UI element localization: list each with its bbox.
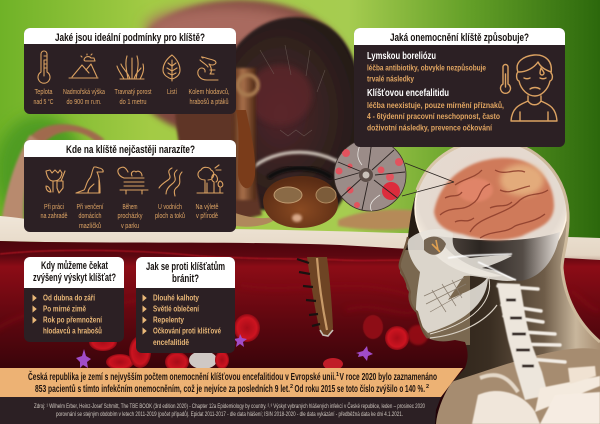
- icon: leaf: [163, 55, 180, 81]
- human head x-ray: [400, 130, 600, 424]
- heading: when to expect ticks: [24, 257, 124, 288]
- panel: where you meet ticks: Kde na klíště nejčastěji narazíte?: [66, 144, 195, 156]
- callout: statistics strip: 853 pacientů s tímto infekčním onemocněním, což je nejvíce za posledních 9 let.: [35, 383, 290, 395]
- text: tick-borne encephalitis: léčba neexistuje, pouze mírnění příznaků,: [367, 100, 504, 110]
- list: protection measures: Repelenty: [153, 314, 184, 324]
- list: months and conditions: [33, 292, 102, 336]
- purple platelets: [76, 334, 373, 368]
- text: tick-borne encephalitis: [367, 88, 504, 132]
- icon captions: Listí: [167, 89, 177, 96]
- text: Lyme borreliosis: trvalé následky: [367, 74, 414, 84]
- text: tick-borne encephalitis: doživotní následky, prevence očkování: [367, 124, 493, 132]
- text: tick-borne encephalitis: 4 - 6týdenní pracovní neschopnost, často: [367, 112, 500, 121]
- icon: thermometer: [38, 51, 50, 83]
- panel: diseases: Jaká onemocnění klíště způsobuje?: [390, 32, 529, 44]
- icon captions: [34, 88, 230, 106]
- panel: how to protect: bránit?: [172, 273, 199, 285]
- brain: [434, 158, 554, 240]
- icon captions: procházky: [118, 213, 143, 220]
- callout: statistics strip: 1: [336, 372, 339, 378]
- text: sources strip: porovnání se stejným obdobím v letech 2011-2019 (počet případů). Epidat 2011-2017 - dle data hlášení; ISIN 2018-2020 - dle data vykázání - předběžná data ke dni 4.1.2021.: [56, 411, 403, 418]
- panel: when to expect ticks: Kdy můžeme čekat: [41, 260, 108, 272]
- icon captions: ploch a toků: [155, 212, 185, 220]
- icon captions: domácích: [78, 213, 102, 220]
- skull face bones: [408, 229, 516, 333]
- panel: ideal conditions: Jaké jsou ideální podmínky pro klíště?: [55, 32, 205, 44]
- panel: where you meet ticks: [24, 140, 236, 232]
- text: tick-borne encephalitis: Klíšťovou encefalitidu: [367, 88, 449, 99]
- panel: how to protect: [136, 257, 235, 353]
- list: months and conditions: Po mírné zimě: [43, 304, 86, 314]
- icon captions: do 900 m n.m.: [66, 99, 102, 106]
- icon: mountains and sun: [69, 54, 98, 78]
- tick hypostome in skin: [297, 257, 333, 336]
- panel: diseases: [354, 28, 565, 147]
- heading: where you meet ticks: [24, 140, 236, 157]
- vertebrae spine: [472, 283, 600, 424]
- blood vessel background: [0, 241, 600, 424]
- callout: statistics strip: 2: [290, 384, 293, 390]
- icon captions: nad 5 °C: [34, 98, 54, 106]
- icon: trees: [197, 165, 223, 193]
- icon captions: hrabošů a ptáků: [190, 98, 229, 106]
- callout: statistics strip: Česká republika je zemí s nejvyšším počtem onemocnění klíšťovou encefalitidou v Evropské unii.: [28, 370, 336, 383]
- text: Lyme borreliosis: [367, 51, 486, 84]
- tick legs: [232, 68, 256, 200]
- heading: ideal conditions: [24, 28, 236, 44]
- list: protection measures: Světlé oblečení: [153, 304, 199, 314]
- icon captions: Na výletě: [196, 204, 219, 211]
- text: Lyme borreliosis: Lymskou boreliózu: [367, 51, 436, 62]
- list: months and conditions: Od dubna do září: [43, 292, 95, 302]
- text: sources strip: Zdroj: ¹ Wilhelm Erber, Heinz-Josef Schmitt, The TBE BOOK (3rd edition 2020) - Chapter 12a Epidemiology by country. ²˒³ Výskyt vybraných hlášených infekcí v České republice, leden – prosinec 2020: [34, 403, 425, 410]
- tick mouth capitulum: [263, 176, 338, 228]
- human skin layer: [0, 216, 600, 262]
- heading: diseases: [354, 28, 565, 45]
- heading: how to protect: [136, 257, 235, 288]
- icon: squirrel: [198, 57, 218, 80]
- icon captions: [40, 204, 219, 230]
- panel: when to expect ticks: zvýšený výskyt klíšťat?: [33, 272, 116, 284]
- callout: statistics strip: Od roku 2015 se toto číslo zvýšilo o 140 %.: [294, 383, 425, 395]
- skull cranium: [415, 140, 567, 276]
- icon captions: do 1 metru: [120, 99, 147, 106]
- icon captions: Při práci: [44, 204, 64, 211]
- text: Lyme borreliosis: léčba antibiotiky, obvykle nezpůsobuje: [367, 62, 486, 72]
- list: protection measures: [143, 292, 221, 347]
- list: protection measures: Očkování proti klíšťové: [153, 326, 221, 336]
- tick body with legs: [0, 0, 430, 232]
- icon captions: Nadmořská výška: [63, 89, 105, 96]
- icon: river: [159, 168, 182, 196]
- icon captions: na zahradě: [40, 213, 68, 220]
- list: months and conditions: hlodavců a hrabošů: [43, 326, 102, 336]
- icon captions: v přírodě: [196, 213, 218, 220]
- panel: when to expect ticks: [24, 257, 124, 342]
- callout: statistics strip: V roce 2020 bylo zaznamenáno: [340, 371, 437, 383]
- callout: statistics strip: 2: [426, 384, 429, 390]
- icon captions: U vodních: [158, 204, 182, 211]
- list: protection measures: Dlouhé kalhoty: [153, 292, 199, 302]
- callout: statistics strip: [0, 368, 463, 397]
- icon captions: v parku: [121, 223, 139, 230]
- icon captions: Teplota: [34, 89, 53, 96]
- icon: feverish person: [501, 55, 557, 121]
- panel: ideal conditions: [24, 28, 236, 114]
- icon captions: mazlíčků: [79, 222, 101, 230]
- list: protection measures: encefalitidě: [153, 337, 189, 347]
- text: sources strip: [0, 397, 441, 424]
- icon captions: Během: [122, 204, 138, 211]
- icon: park bench: [118, 167, 148, 194]
- list: months and conditions: Rok po přemnožení: [43, 314, 102, 324]
- red blood cells: [89, 314, 428, 372]
- icon: sitting dog: [76, 167, 103, 193]
- virus inset circle with pointer: [334, 139, 454, 212]
- icon: tall grass: [117, 56, 144, 79]
- panel: how to protect: Jak se proti klíšťatům: [146, 261, 225, 273]
- icon: garden tools: [46, 170, 65, 193]
- icon captions: Kolem hlodavců,: [188, 88, 230, 96]
- icon captions: Při venčení: [76, 204, 104, 211]
- icon captions: Travnatý porost: [114, 89, 152, 96]
